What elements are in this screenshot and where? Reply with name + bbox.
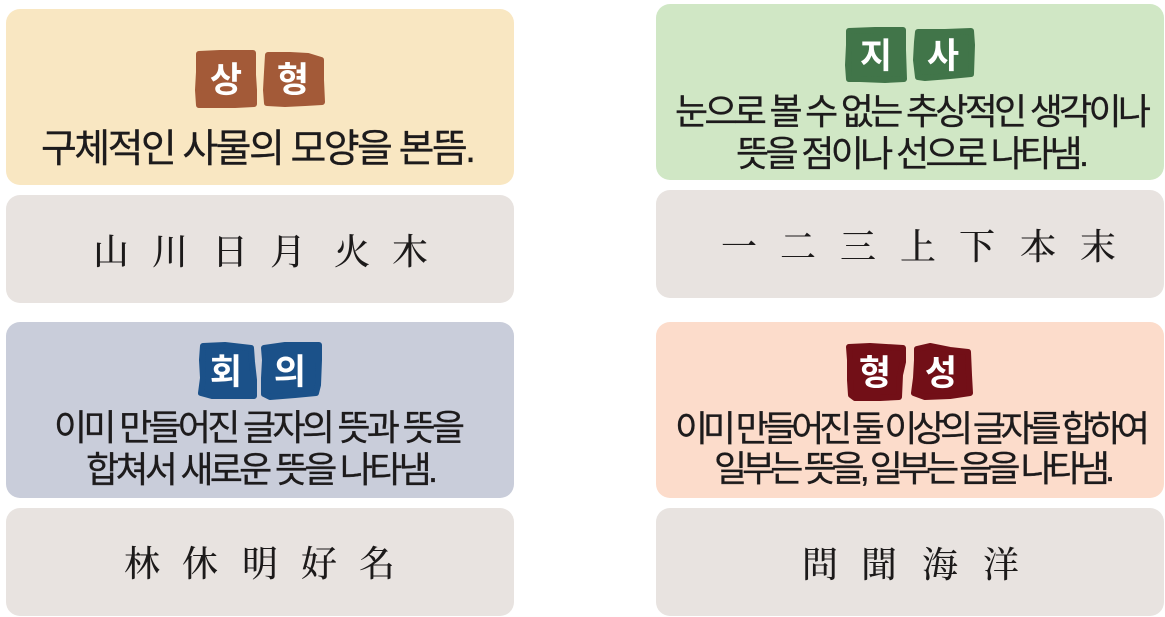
형성 example card <box>656 508 1164 616</box>
panel: 지사 <box>656 4 1164 298</box>
형성 example characters: 問聞海洋 <box>802 545 1019 585</box>
회의 definition card <box>6 322 514 498</box>
지사 stamp heading <box>848 30 972 80</box>
회의 example card <box>6 508 514 616</box>
지사 stamp heading: 사 <box>927 37 959 76</box>
panel: 형성 <box>656 322 1164 616</box>
회의 description: 합쳐서 새로운 뜻을 나타냄. <box>86 449 438 490</box>
형성 stamp heading: 성 <box>925 354 957 393</box>
panel: 회의 <box>6 322 514 616</box>
상형 stamp heading: 형 <box>277 61 309 100</box>
지사 definition card <box>656 4 1164 180</box>
회의 description <box>54 407 465 490</box>
형성 definition card <box>656 322 1164 498</box>
형성 description <box>675 408 1150 489</box>
지사 stamp heading: 지 <box>860 37 892 76</box>
상형 example card <box>6 195 514 303</box>
형성 description: 이미 만들어진 둘 이상의 글자를 합하여 <box>675 408 1150 449</box>
지사 description: 뜻을 점이나 선으로 나타냄. <box>736 133 1089 174</box>
지사 description: 눈으로 볼 수 없는 추상적인 생각이나 <box>675 91 1151 132</box>
panel: 상형 <box>6 9 514 303</box>
상형 stamp heading: 상 <box>210 61 242 100</box>
회의 stamp heading: 회 <box>210 353 242 392</box>
회의 description: 이미 만들어진 글자의 뜻과 뜻을 <box>54 407 465 448</box>
회의 stamp heading: 의 <box>274 353 306 392</box>
형성 stamp heading <box>849 346 970 398</box>
형성 description: 일부는 뜻을, 일부는 음을 나타냄. <box>714 448 1115 489</box>
지사 description <box>675 91 1151 174</box>
형성 stamp heading: 형 <box>859 354 891 393</box>
상형 example characters: 山川日月火木 <box>93 232 428 272</box>
상형 description: 구체적인 사물의 모양을 본뜸. <box>41 128 476 171</box>
회의 example characters: 林休明好名 <box>124 544 395 584</box>
지사 example characters: 一二三上下本末 <box>721 227 1116 267</box>
상형 definition card <box>6 9 514 185</box>
회의 stamp heading <box>201 345 319 397</box>
지사 example card <box>656 190 1164 298</box>
상형 stamp heading <box>198 53 322 105</box>
